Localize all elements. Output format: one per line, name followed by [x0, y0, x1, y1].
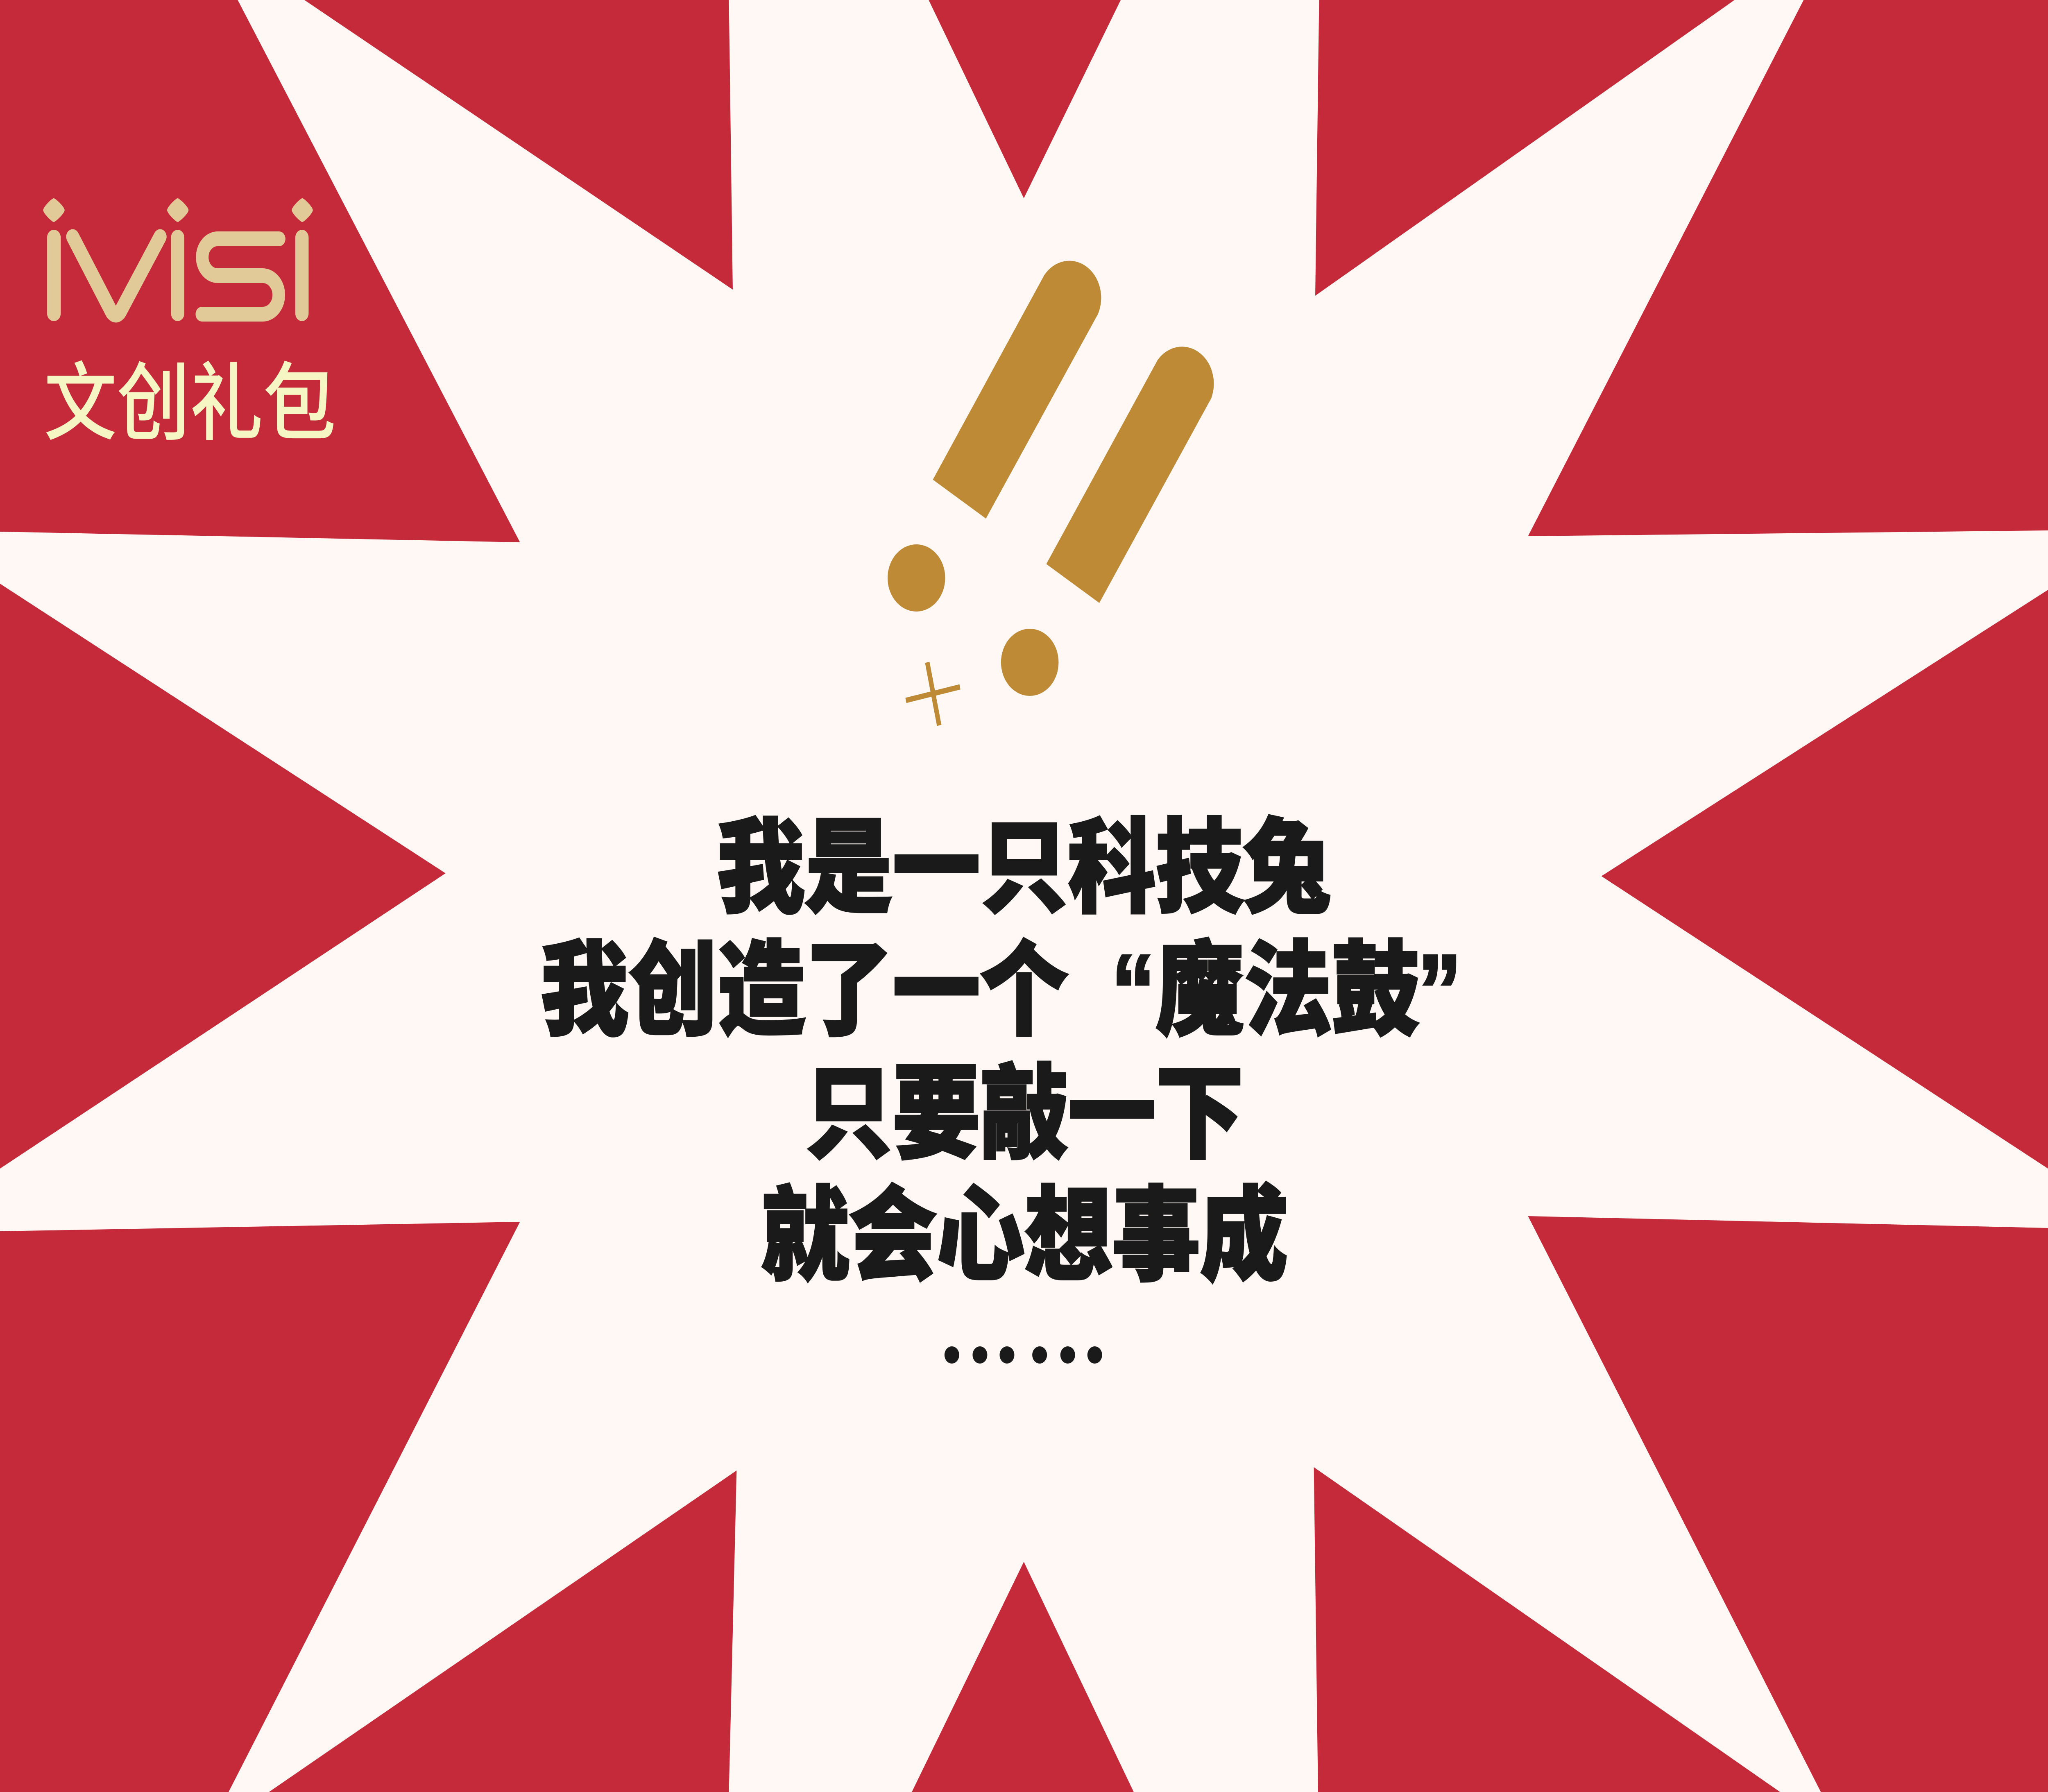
- logo wordmark: [43, 198, 313, 321]
- line 2: 我创造了一个“魔法鼓”: [541, 934, 1461, 1048]
- main text block: [541, 811, 1461, 1294]
- left dot: [888, 544, 945, 612]
- line 3: 只要敲一下: [805, 1057, 1244, 1171]
- logo subtitle: 文创礼包: [44, 356, 336, 451]
- cross: [906, 662, 960, 725]
- line 4: 就会心想事成: [761, 1179, 1288, 1294]
- icon: exclamation marks and cross: [888, 261, 1214, 725]
- right bar: [1046, 347, 1214, 603]
- logo: iVISI wordmark with subtitle: [43, 198, 336, 451]
- ellipsis dots: [945, 1346, 1102, 1364]
- right dot: [1001, 629, 1058, 696]
- left bar: [933, 261, 1101, 519]
- line 1: 我是一只科技兔: [717, 811, 1331, 926]
